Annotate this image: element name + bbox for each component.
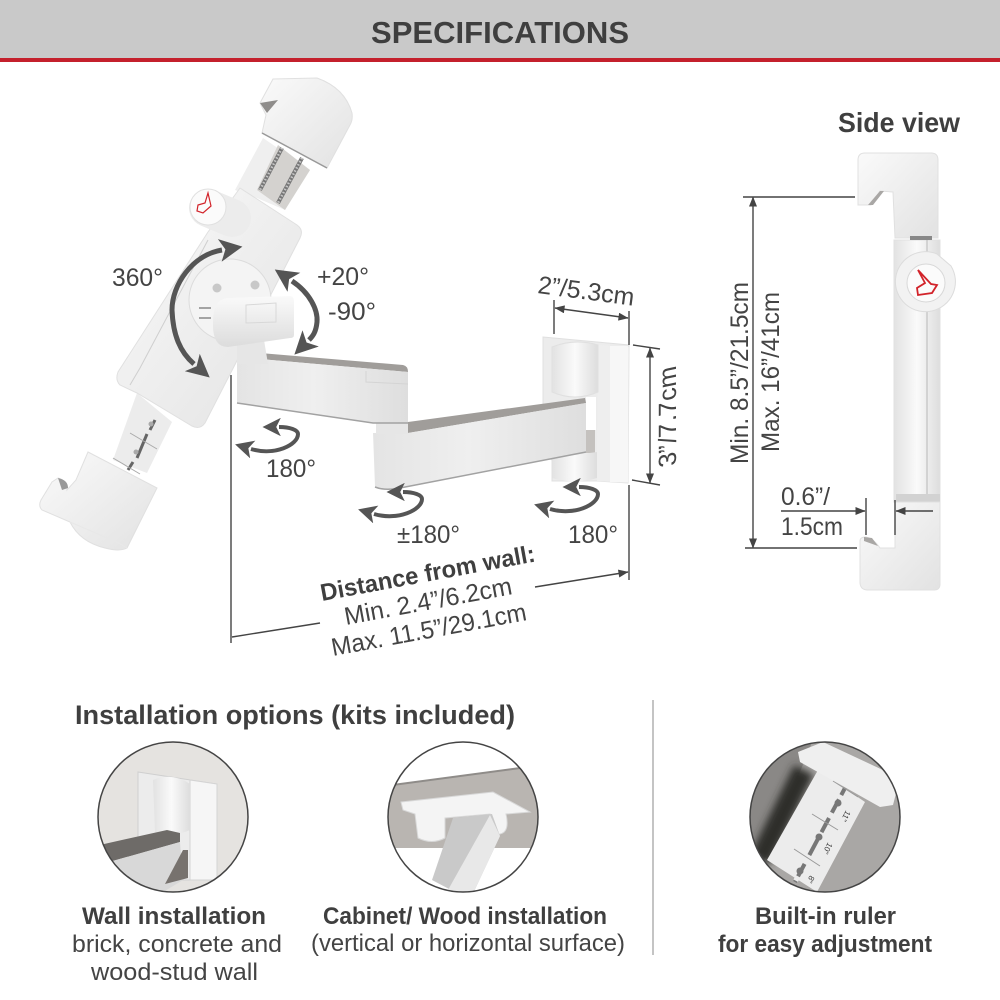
tablet holder: lower rail: [113, 393, 172, 474]
dimension: distance from wall: Distance from wall:: [318, 541, 537, 607]
side view: bottom clamp: [860, 502, 940, 590]
caption: wall installation: Wall installation: [82, 903, 266, 930]
arrow: upper arm 180: [251, 427, 298, 451]
arrow: tilt +20 -90: [292, 281, 317, 340]
label: +20: +20°: [317, 263, 369, 291]
dimension: grip depth: 0.6”/: [781, 483, 830, 511]
header band: [0, 0, 1000, 62]
dimension: grip depth: [781, 483, 933, 541]
circular photo: ruler detail: 10”: [821, 841, 834, 856]
rotation labels: [112, 263, 618, 549]
caption: built-in ruler: for easy adjustment: [718, 931, 932, 958]
upper arm: [237, 352, 408, 434]
product illustration: swing arm tablet mount: [40, 78, 629, 643]
lower arm: [373, 398, 586, 489]
label: 180 upper arm: 180°: [266, 455, 316, 483]
caption: cabinet installation: (vertical or horizontal surface): [311, 930, 625, 957]
rotation arrows: [172, 250, 598, 516]
side view: central body: [894, 240, 940, 502]
circular photo: ruler detail: 11”: [839, 809, 852, 823]
caption: wall installation: [72, 903, 282, 986]
tablet holder: main plate: [117, 188, 301, 427]
arrow: bracket 180: [550, 487, 598, 511]
arrow: 360 degree rotation: [172, 250, 222, 364]
tablet holder: bottom clamp: [40, 452, 157, 550]
dimension: distance from wall: [232, 485, 629, 662]
dimension: bracket width: [536, 271, 636, 345]
label: 180 bracket: 180°: [568, 521, 618, 549]
caption: wall installation: wood-stud wall: [90, 959, 258, 986]
caption: wall installation: brick, concrete and: [72, 931, 282, 958]
circular photo: ruler detail: 8”: [805, 874, 816, 885]
measure line: mount to wall left extent: [230, 375, 232, 643]
caption: built-in ruler: [718, 903, 932, 958]
dimension: bracket height: 3”/7.7cm: [654, 364, 682, 470]
panel: cabinet and wood installation: [311, 740, 625, 957]
dimension: bracket height: [632, 345, 682, 485]
label: 360: 360°: [112, 264, 163, 292]
wall bracket: [543, 337, 629, 483]
caption: built-in ruler: Built-in ruler: [755, 903, 896, 930]
caption: cabinet installation: [311, 903, 625, 957]
arrow: lower arm 180: [374, 492, 422, 516]
title: SPECIFICATIONS: [371, 15, 629, 50]
heading: installation options: Installation options (kits included): [75, 700, 515, 730]
circular photo: wall mount: [95, 740, 255, 900]
dimension: grip depth: 1.5cm: [781, 513, 843, 541]
dimension: distance from wall: Min. 2.4”/6.2cm: [342, 572, 514, 631]
bracket and distance dimensions: [232, 271, 682, 662]
circular photo: cabinet mount: [387, 741, 539, 893]
rotating disk and swivel cylinder: [189, 259, 294, 364]
heading: side view: Side view: [838, 107, 960, 138]
side view: knob with red logo: [895, 252, 955, 312]
panel: built-in ruler: [718, 735, 932, 958]
label: -90: -90°: [328, 298, 376, 326]
label: 180 lower arm: ±180°: [397, 521, 460, 549]
side view: [726, 107, 960, 590]
dimension: distance from wall: Max. 11.5”/29.1cm: [329, 598, 529, 662]
tablet holder: top clamp: [260, 78, 352, 168]
dimension: clamp range: Min. 8.5”/21.5cm: [726, 282, 754, 464]
panel: wall installation: [72, 740, 282, 986]
dimension: clamp range: Max. 16”/41cm: [757, 292, 785, 452]
dimension: clamp range: [726, 197, 857, 548]
adjustment knob with red logo: [190, 189, 232, 225]
caption: cabinet installation: Cabinet/ Wood installation: [323, 903, 607, 930]
dimension: bracket width: 2”/5.3cm: [536, 271, 636, 312]
side view: top clamp: [858, 153, 938, 240]
tablet holder: upper rail with springs: [235, 138, 310, 210]
circular photo: ruler detail: [749, 741, 901, 893]
